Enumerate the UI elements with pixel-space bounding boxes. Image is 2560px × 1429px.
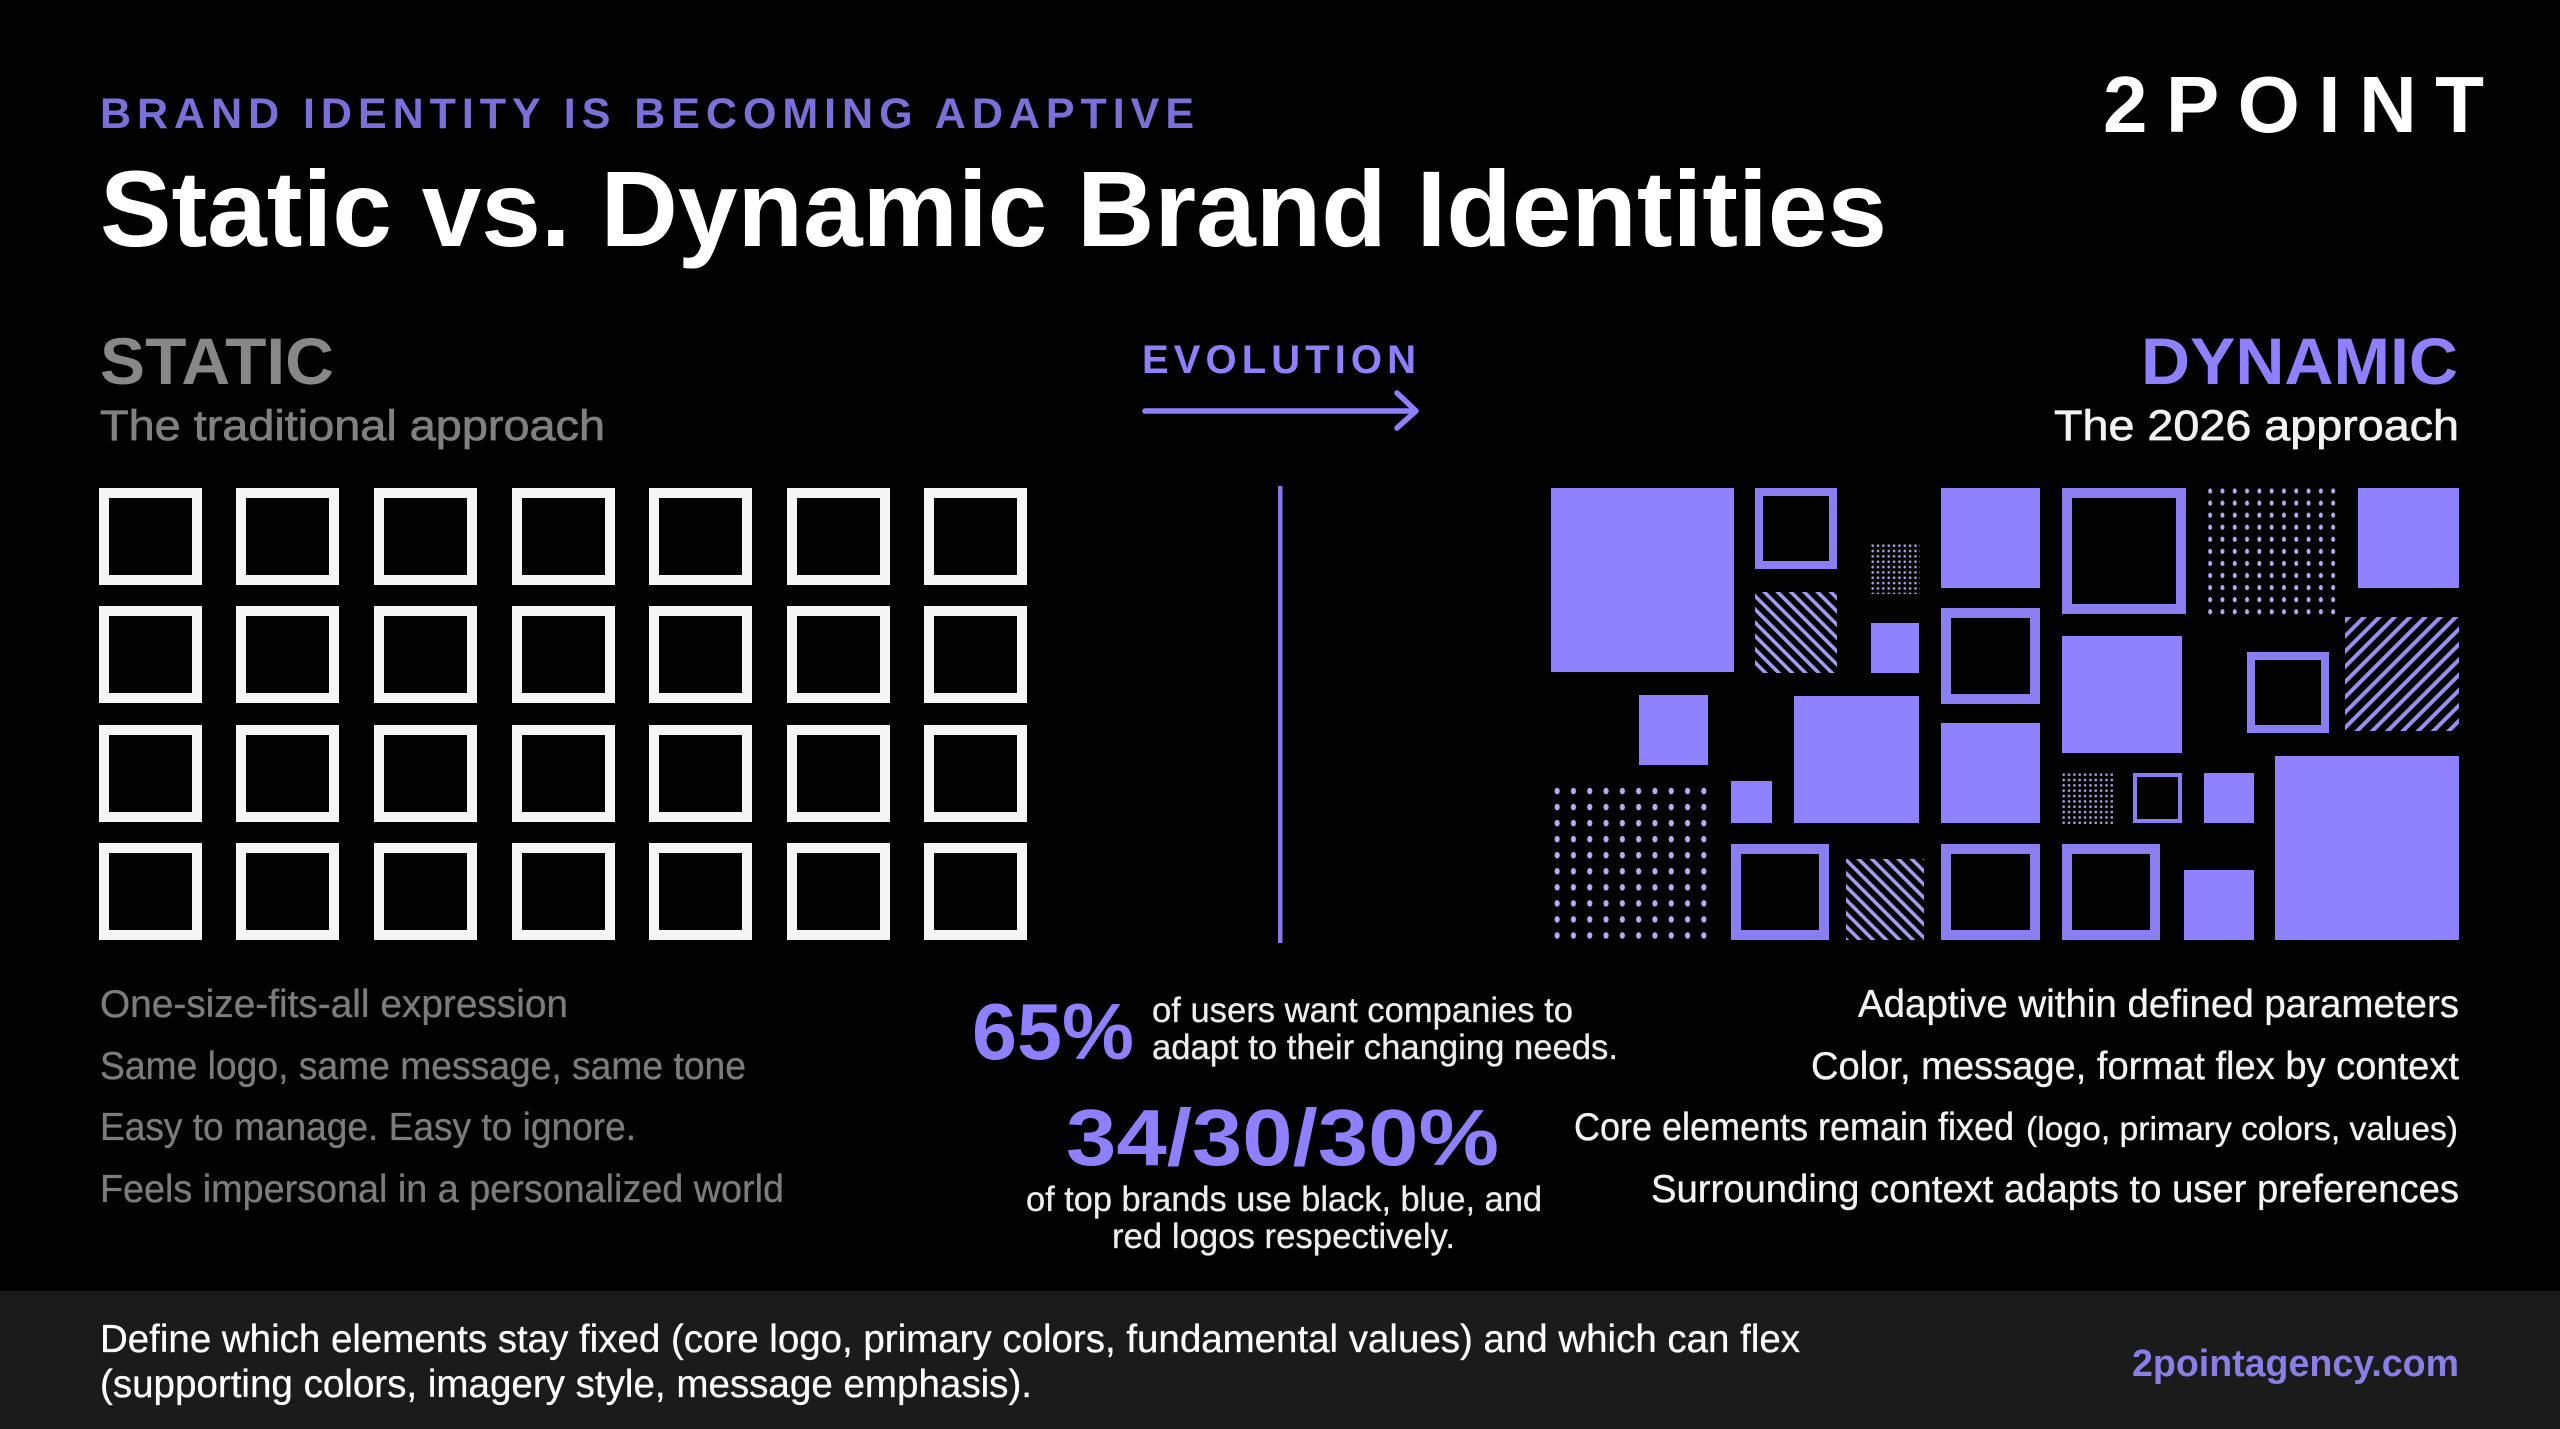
- dynamic bullet list: Surrounding context adapts to user preferences: [1651, 1168, 2459, 1211]
- dynamic bullet list: Color, message, format flex by context: [1811, 1045, 2459, 1088]
- footer bar: [0, 1291, 2560, 1429]
- vertical divider: [1278, 486, 1282, 943]
- footer text: Define which elements stay fixed (core logo, primary colors, fundamental values) and which can flex: [100, 1318, 1800, 1361]
- static bullet list: One-size-fits-all expression: [100, 983, 568, 1026]
- footer text: [100, 1318, 1800, 1406]
- footer url: 2pointagency.com: [2132, 1343, 2459, 1385]
- static bullet list: Feels impersonal in a personalized world: [100, 1168, 784, 1211]
- stat: 34/30/30%: 34/30/30%: [1066, 1093, 1499, 1182]
- static heading: STATIC: [100, 324, 334, 398]
- dynamic bullet list: (logo, primary colors, values): [2026, 1110, 2458, 1147]
- stat: 65%: 65%: [972, 987, 1134, 1076]
- dynamic mosaic of varied shapes: [1549, 485, 2459, 943]
- static heading: The traditional approach: [100, 402, 605, 450]
- dot patterns: [1549, 485, 2339, 943]
- outlined squares: [1736, 492, 2325, 935]
- dynamic heading: DYNAMIC: [2141, 324, 2458, 398]
- arrow: evolution: [1145, 393, 1416, 428]
- stat: 34/30/30%: red logos respectively.: [1112, 1217, 1455, 1256]
- eyebrow: BRAND IDENTITY IS BECOMING ADAPTIVE: [100, 90, 1194, 138]
- static heading: [100, 324, 605, 450]
- stat: 65%: adapt to their changing needs.: [1152, 1028, 1618, 1067]
- static grid of identical squares: [104, 493, 1022, 935]
- dynamic heading: [2054, 324, 2459, 450]
- static bullet list: Same logo, same message, same tone: [100, 1045, 746, 1088]
- static bullet list: Easy to manage. Easy to ignore.: [100, 1106, 636, 1149]
- stat: 34/30/30%: of top brands use black, blue, and: [1026, 1180, 1542, 1219]
- solid squares: [1551, 488, 2459, 940]
- static bullet list: [100, 983, 784, 1211]
- dynamic heading: The 2026 approach: [2054, 402, 2459, 450]
- evolution label: EVOLUTION: [1142, 338, 1416, 382]
- dynamic bullet list: Core elements remain fixed: [1574, 1106, 2014, 1149]
- dynamic bullet list: Adaptive within defined parameters: [1858, 983, 2459, 1026]
- logo: 2POINT: 2POINT: [2103, 60, 2484, 149]
- stat: 34/30/30%: [1026, 1093, 1542, 1256]
- title: Static vs. Dynamic Brand Identities: [100, 148, 1887, 269]
- dynamic bullet list: [1574, 983, 2459, 1211]
- stat: 65%: of users want companies to: [1152, 991, 1573, 1030]
- hatched squares: [1755, 592, 2459, 940]
- stat: 65%: [972, 987, 1618, 1076]
- footer text: (supporting colors, imagery style, message emphasis).: [100, 1363, 1032, 1406]
